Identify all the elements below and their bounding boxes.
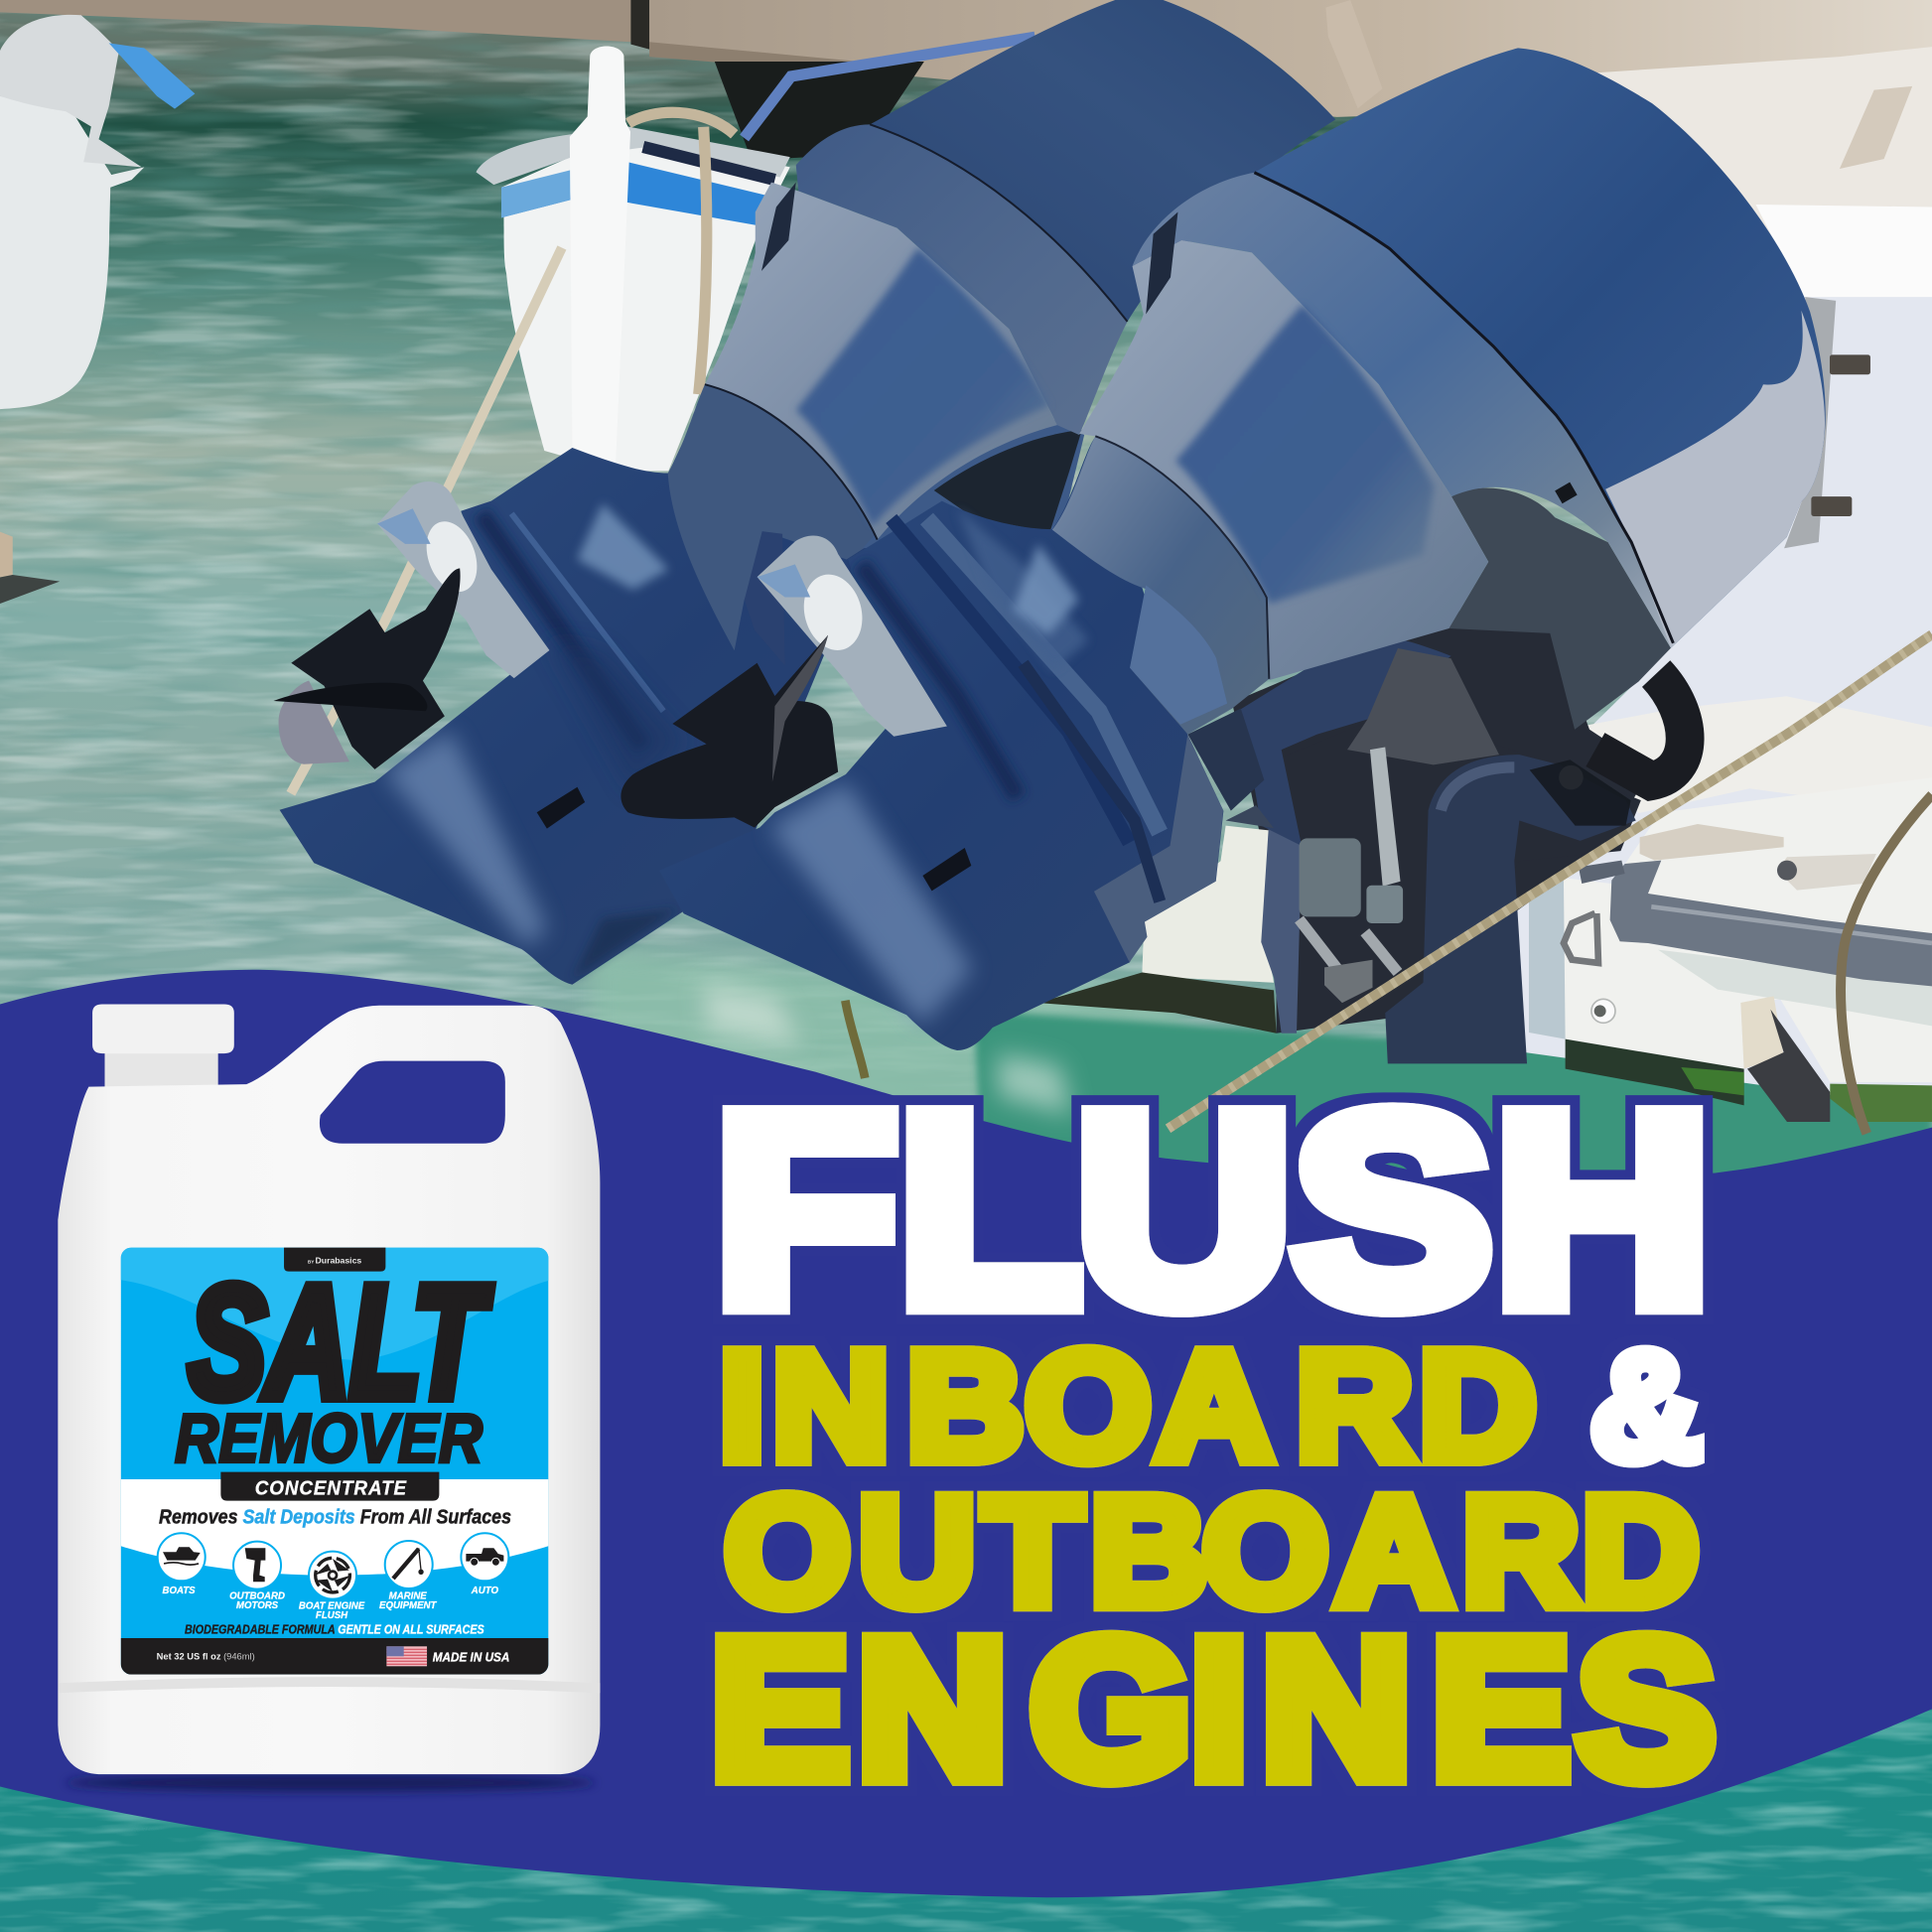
rear prop thin blade [273,683,427,711]
console stripe [1840,86,1912,169]
front lower seam [1095,436,1269,679]
warning tag [1555,483,1578,503]
front outboard engine [659,48,1826,1050]
front engine dark cowl [1449,488,1671,730]
headline word: INBOARD: INBOARD [720,1319,1536,1492]
icon: engine flush [309,1552,356,1599]
bolt head [1559,765,1584,789]
transom [1488,297,1932,1109]
collar and under-collar [1024,663,1274,962]
ram cylinder [1366,886,1403,923]
background: harbour water [0,0,1932,1232]
mount left rail [1261,826,1302,1034]
rear seam [705,124,1128,540]
label black footer [121,1638,548,1675]
front propeller and plate [621,531,971,891]
clamp bracket [1385,755,1636,1063]
rear engine leg [280,397,876,985]
usage labels: MARINE [389,1591,427,1602]
front engine lower cowl [1052,436,1269,735]
usage labels: BOATS [162,1586,196,1596]
usage labels: FLUSH [316,1610,348,1621]
icon: boat [158,1533,206,1581]
front engine main panel [1079,240,1488,680]
front engine seam [1254,173,1673,643]
icon: marine equipment [385,1541,433,1588]
bottle ground shadow [66,1774,595,1792]
made in usa: MADE IN USA [433,1649,509,1664]
product bottle [58,1004,600,1792]
bottle neck [104,1047,218,1092]
dock wall [0,0,1932,160]
white hull right side [1488,47,1932,1122]
rear gap shadow [934,430,1082,532]
rear panel backing [863,419,1084,548]
usage labels: EQUIPMENT [379,1600,438,1611]
deck [1756,205,1932,301]
rear engine dark panel [796,247,1049,526]
formula line: BIODEGRADABLE FORMULA GENTLE ON ALL SURFACES [185,1622,484,1636]
rear outboard engine [280,0,1335,985]
usage labels: AUTO [471,1586,498,1596]
front plate oval [795,568,871,657]
bottle cap [92,1004,234,1053]
label top highlight [121,1248,548,1360]
bottle body [58,1006,600,1774]
tilt rod [1370,748,1401,887]
engine well backing [1232,610,1651,936]
tagline: Removes Salt Deposits From All Surfaces [159,1505,511,1528]
inner strut [1347,648,1499,764]
bottle label [121,1248,548,1675]
rear engine lower cowl [668,384,878,650]
brand name: BY Durabasics [308,1256,361,1266]
moored boat left [0,15,195,604]
waterline shadow [1038,973,1277,1034]
label background [121,1248,548,1675]
rear leg details [385,503,684,980]
motor well lip [1578,696,1932,813]
rear engine main panel [705,183,1057,540]
front engine band [1133,173,1671,648]
front plate bracket [745,531,785,665]
interior dark [1277,709,1641,1034]
bracket upper [1830,354,1870,374]
main mooring rope [1169,634,1932,1129]
front engine cap [1254,48,1826,648]
rear propeller and plate [273,482,585,829]
rear plate blue corner [377,508,431,544]
exhaust hose [1595,674,1685,781]
rear engine band [796,124,1128,435]
side mooring rope on small boat [628,112,735,394]
silver bar [1784,297,1836,548]
cleat linkage [1530,759,1631,826]
net volume: Net 32 US fl oz (946ml) [157,1652,255,1662]
rear engine vent [761,183,796,271]
front plate blue corner [758,564,810,597]
hull lower section [1529,777,1932,1122]
front engine dark panel [1175,305,1435,604]
usage labels: MOTORS [236,1600,279,1611]
headline ampersand: & [1590,1319,1702,1491]
product name SALT: SALT [189,1253,491,1431]
clamp highlight [1441,767,1514,810]
front plate [758,536,947,737]
hull rope [1841,794,1932,1134]
front engine leg [659,437,1223,1050]
rear trim tab [537,787,585,829]
front leg details [769,508,1160,1025]
hydraulic rods [1300,919,1398,975]
bottle base rib [60,1677,600,1693]
rear plate [377,482,549,678]
headline word: OUTBOARD: OUTBOARD [725,1464,1699,1637]
label white band [121,1479,548,1576]
front trim tab [922,848,971,891]
bracket lower [1811,496,1852,516]
front cap silver reflection [1605,311,1825,648]
hydraulic block [1324,960,1372,1003]
front prop [621,635,838,828]
front engine hatch [1130,586,1227,725]
concentrate tab [220,1472,439,1501]
front prop blade highlight [772,635,828,782]
blue railing [745,37,1035,138]
rear mooring rope [291,247,562,793]
small boat behind engines [476,47,790,471]
product name REMOVER: REMOVER [175,1400,483,1477]
icon: pickup truck [461,1533,508,1581]
rear prop hub [291,568,461,769]
rope twist [1169,634,1932,1129]
rear engine cap [870,0,1335,322]
usage labels: OUTBOARD [229,1591,285,1602]
usage labels: BOAT ENGINE [299,1601,365,1612]
tilt bracket [1241,636,1451,846]
hull white section left of bracket [1142,826,1274,983]
bottom sea water [0,1709,1932,1932]
headline [711,1058,1716,1820]
rear prop grey blade [279,681,349,764]
rear plate oval [417,514,486,599]
mechanism group: bracket and hydraulics [1038,636,1641,1063]
concentrate text: CONCENTRATE [255,1477,407,1499]
headline word: ENGINES: ENGINES [711,1599,1716,1820]
front collar tip [1187,709,1264,811]
icon: outboard motor [233,1542,281,1589]
mooring ropes [845,634,1932,1134]
trim motor [1300,838,1361,916]
headline word: FLUSH: FLUSH [715,1058,1711,1362]
blue wave band [0,970,1932,1897]
usage labels [162,1586,498,1621]
icon: USA flag [386,1646,427,1666]
front engine vent [1146,211,1177,314]
seat console [1540,47,1932,308]
anchor rope [845,1001,865,1078]
brand tab [284,1248,385,1272]
